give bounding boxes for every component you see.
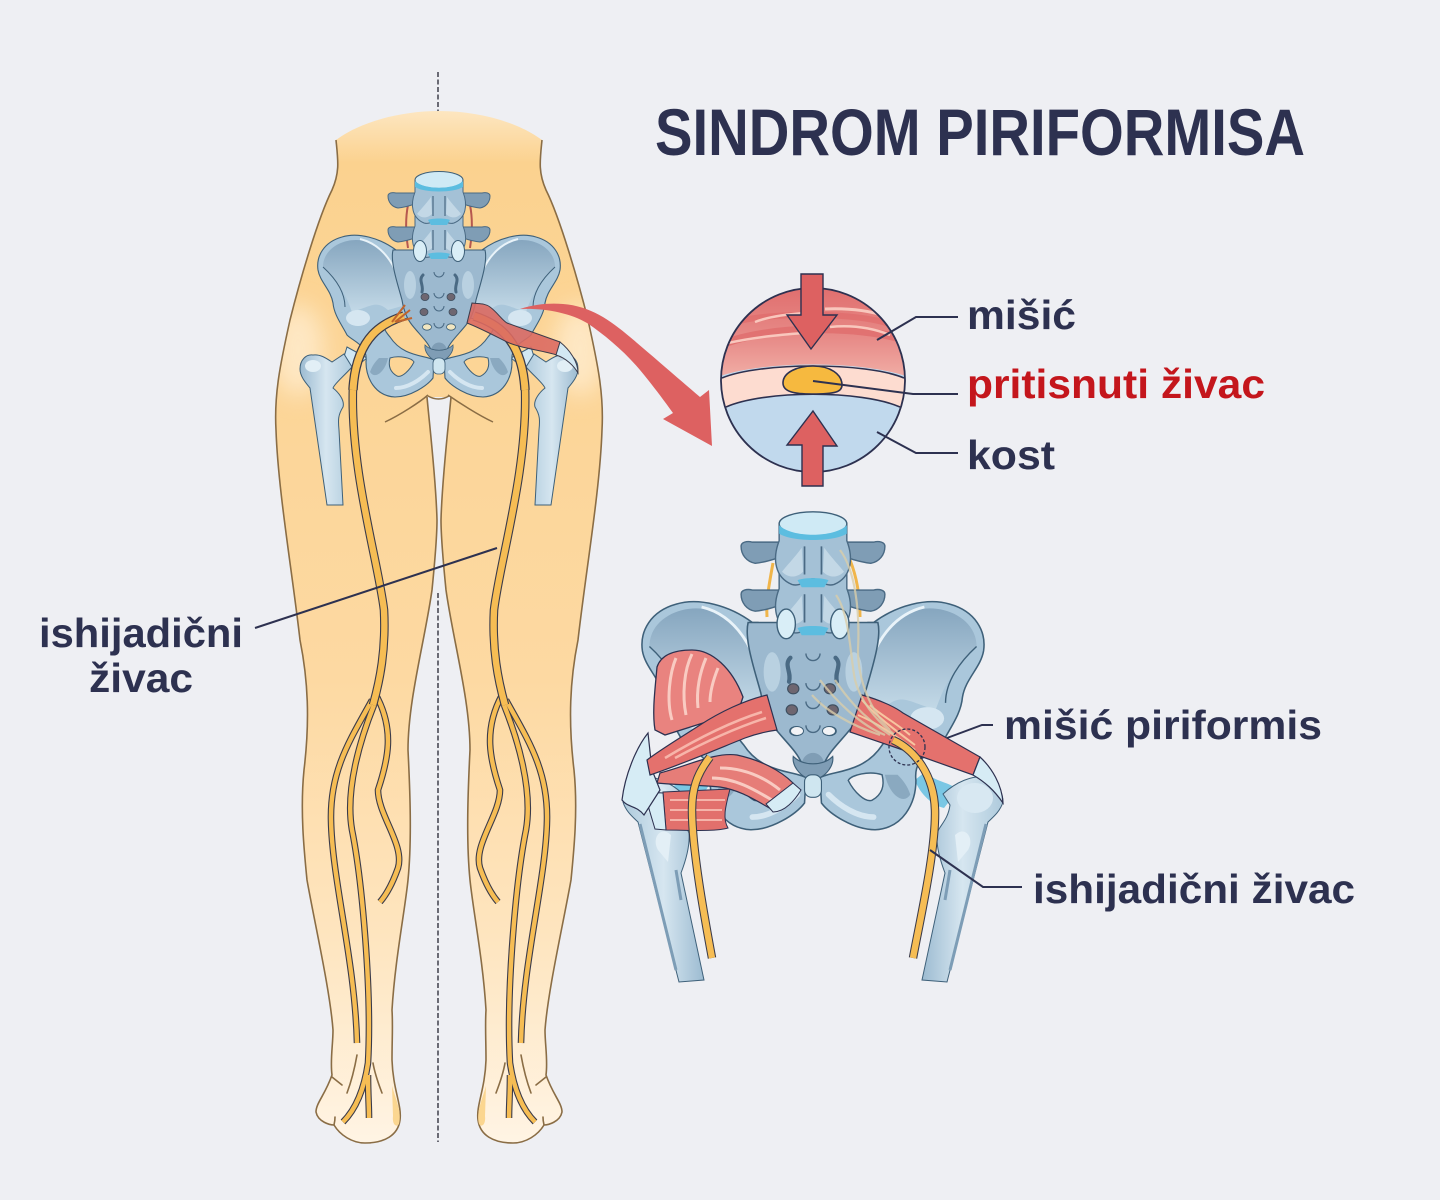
femur left: [623, 772, 711, 982]
detail circle: compressed nerve: [715, 274, 911, 486]
right piriformis: [850, 695, 980, 775]
compressed nerve: [783, 366, 842, 394]
nerve sheath layer: [722, 365, 904, 408]
lower hip muscles: [644, 755, 801, 830]
body outline: [276, 140, 602, 1143]
sciatic nerve right: [893, 740, 935, 958]
vertical center line top: [437, 72, 439, 150]
sciatic nerve left: [692, 757, 712, 958]
hip highlights: [272, 304, 606, 396]
dashed compression circle: [889, 729, 925, 765]
femur left: [300, 347, 367, 505]
buttock lines: [385, 395, 493, 422]
white sacral foramina: [790, 726, 836, 736]
right muscle fibres: [858, 700, 915, 750]
muscle layer: [722, 290, 904, 376]
title: SINDROM PIRIFORMISA: [655, 95, 1305, 169]
label: piriformis muscle: mišić piriformis: [1004, 702, 1322, 748]
left piriformis: [647, 695, 777, 775]
bottom pressure arrow: [787, 411, 837, 486]
foot details left: [332, 1055, 400, 1126]
leader: muscle: [877, 317, 958, 340]
nerve upper left trunk: [353, 305, 412, 390]
femur right: [915, 772, 1003, 982]
piriformis muscle right: [467, 303, 560, 355]
figure: pelvis detail with muscles: [622, 512, 1003, 982]
body silhouette fill: [276, 111, 602, 1143]
spinal nerve roots: [767, 560, 860, 617]
thin nerve fibres: [812, 550, 895, 735]
leader: sciatic nerve right: [930, 850, 1022, 887]
curved arrow to detail: [520, 304, 712, 446]
right tendon: [973, 757, 1003, 803]
gluteal muscle: [654, 650, 743, 735]
leader: compressed nerve: [813, 381, 958, 394]
nerve right leg: [479, 387, 547, 1122]
label: sciatic nerve right: ishijadični živac: [1033, 866, 1355, 912]
label: sciatic nerve left: ishijadični: [39, 610, 243, 656]
foot details right: [478, 1055, 546, 1126]
nerve upper right trunk: [474, 316, 525, 390]
figure: human lower body back view: [272, 111, 606, 1143]
femur right: [511, 347, 578, 505]
nerve left leg: [331, 387, 399, 1122]
leader: bone: [877, 432, 958, 453]
leader: piriformis muscle: [947, 725, 993, 738]
label: muscle: mišić: [967, 292, 1076, 338]
muscle fibres: [720, 309, 905, 345]
label: bone: kost: [967, 432, 1055, 478]
label: compressed nerve: pritisnuti živac: [967, 361, 1265, 407]
lower center line: [437, 593, 439, 1142]
left tendon: [622, 733, 660, 815]
label: sciatic nerve left: živac: [89, 655, 193, 701]
pelvis and lumbar spine: [642, 512, 984, 830]
label: sciatic nerve left: [39, 610, 243, 701]
top pressure arrow: [787, 274, 837, 349]
left muscle fibres: [665, 712, 766, 758]
leader: sciatic nerve left: [255, 548, 497, 628]
muscle tendon: [556, 342, 578, 373]
pelvis and lumbar spine: [318, 172, 560, 397]
spinal nerve roots behind vertebrae: [406, 205, 472, 248]
